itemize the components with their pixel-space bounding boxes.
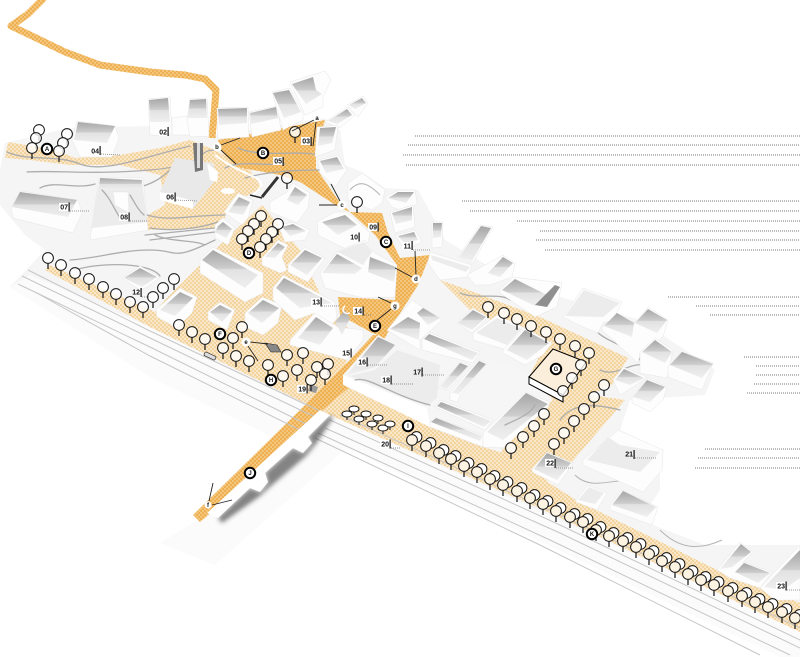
marker I bbox=[403, 421, 413, 431]
viewpoint d: d bbox=[414, 277, 418, 283]
viewpoint a: a bbox=[315, 116, 319, 122]
dotted legend lines: group 4 bbox=[744, 357, 800, 393]
label 22: 22 bbox=[546, 460, 554, 468]
label 10: 10 bbox=[350, 234, 358, 242]
trees: quarter F and H bbox=[174, 320, 333, 391]
label 21 bbox=[625, 450, 657, 459]
orange public space network bbox=[5, 120, 800, 632]
viewpoint a bbox=[292, 114, 320, 146]
buildings: north-east cluster bbox=[348, 173, 713, 412]
viewpoint g: g bbox=[393, 304, 397, 310]
marker J: J bbox=[248, 471, 252, 477]
trees: plaza singles bbox=[282, 127, 362, 213]
label 16 bbox=[357, 358, 388, 366]
viewpoint e bbox=[242, 338, 268, 361]
viewpoint f: f bbox=[207, 503, 210, 509]
trees: coastal double row bbox=[407, 432, 800, 629]
buildings: west terrace bbox=[11, 121, 160, 290]
label 17: 17 bbox=[413, 370, 421, 376]
label 19 bbox=[297, 384, 308, 394]
label 18 bbox=[381, 376, 413, 384]
viewpoint c bbox=[319, 184, 346, 210]
eastern lane and square G bbox=[440, 280, 628, 505]
dotted legend lines: group 1 bbox=[403, 136, 800, 165]
dotted legend lines: group 5 bbox=[695, 449, 800, 468]
label 06 bbox=[165, 192, 197, 202]
light plaza: D, F and H quarter bbox=[45, 205, 350, 408]
marker C bbox=[381, 237, 391, 247]
marker K bbox=[587, 529, 597, 539]
viewpoint g bbox=[376, 297, 400, 321]
marker F bbox=[215, 329, 225, 339]
marker I: I bbox=[407, 424, 409, 430]
label 04 bbox=[90, 146, 120, 156]
contour lines bbox=[7, 146, 722, 547]
buildings: south-east and far-east bbox=[532, 430, 800, 600]
buildings: central quarter bbox=[156, 183, 397, 360]
marker D: D bbox=[247, 251, 252, 257]
label 15: 15 bbox=[342, 350, 350, 358]
coastal promenade bbox=[307, 383, 800, 632]
viewpoint b: b bbox=[215, 145, 219, 151]
church bbox=[160, 143, 235, 209]
marker A: A bbox=[45, 147, 50, 153]
marker E bbox=[370, 321, 380, 331]
pavilion G bbox=[529, 349, 586, 402]
label 12 bbox=[132, 288, 150, 297]
marker B: B bbox=[261, 151, 266, 157]
trees: east lane around G bbox=[483, 302, 609, 459]
label 08: 08 bbox=[120, 214, 128, 222]
label 14: 14 bbox=[354, 308, 362, 316]
label 19: 19 bbox=[298, 386, 306, 394]
label 02 bbox=[159, 127, 169, 136]
trees: low canopy group at I bbox=[342, 406, 395, 434]
black stair and path details bbox=[204, 155, 350, 393]
dense route C and square E bbox=[338, 212, 430, 337]
marker D bbox=[244, 248, 254, 258]
viewpoint c: c bbox=[340, 203, 344, 209]
marker H bbox=[266, 375, 276, 385]
marker H: H bbox=[269, 378, 273, 384]
label 14 bbox=[353, 306, 372, 316]
label 21: 21 bbox=[625, 452, 633, 458]
label 13: 13 bbox=[312, 300, 320, 306]
viewpoint f bbox=[204, 483, 232, 509]
label 05 bbox=[273, 157, 284, 166]
light plaza: A and church terrace bbox=[5, 140, 262, 230]
label 07 bbox=[59, 202, 90, 212]
dense plaza B bbox=[218, 120, 350, 212]
label 06: 06 bbox=[166, 194, 174, 202]
marker F: F bbox=[218, 332, 222, 338]
label 20 bbox=[380, 440, 400, 448]
label 11: 11 bbox=[404, 244, 411, 250]
label 03: 03 bbox=[302, 138, 310, 146]
label 03 bbox=[301, 137, 312, 146]
label 12: 12 bbox=[132, 290, 140, 296]
pier shadow bbox=[218, 415, 333, 523]
label 13 bbox=[311, 298, 340, 306]
viewpoint markers bbox=[204, 114, 420, 509]
trees: cluster A bbox=[27, 125, 72, 162]
marker C: C bbox=[384, 240, 389, 246]
pier bbox=[207, 410, 330, 518]
label 11 bbox=[402, 241, 430, 250]
label 23: 23 bbox=[777, 584, 785, 590]
buildings: middle block around courtyard bbox=[343, 300, 553, 448]
label 05: 05 bbox=[274, 158, 282, 166]
pier walkway J bbox=[193, 335, 387, 522]
label 20: 20 bbox=[381, 442, 389, 448]
label 10 bbox=[349, 232, 360, 242]
lettered zone markers bbox=[42, 144, 597, 539]
buildings: north row bbox=[148, 71, 368, 187]
viewpoint b bbox=[212, 138, 240, 164]
label 22 bbox=[545, 459, 573, 468]
label 08 bbox=[119, 212, 148, 222]
label 07: 07 bbox=[60, 204, 68, 212]
trees: west row bbox=[43, 253, 179, 318]
dotted legend lines: group 3 bbox=[668, 297, 800, 315]
marker J bbox=[245, 468, 255, 478]
label 04: 04 bbox=[91, 148, 99, 156]
label 09: 09 bbox=[369, 224, 377, 232]
numbered building labels bbox=[59, 127, 800, 590]
marker G: G bbox=[554, 367, 559, 373]
label 18: 18 bbox=[382, 378, 390, 384]
label 17 bbox=[413, 368, 445, 376]
trail: orange hiking path bbox=[11, 0, 216, 138]
seawall stepped contours bbox=[18, 270, 800, 655]
marker E: E bbox=[373, 324, 377, 330]
label 16: 16 bbox=[358, 360, 366, 366]
label 23 bbox=[776, 582, 800, 590]
marker G bbox=[551, 364, 561, 374]
trees: grove D bbox=[237, 211, 283, 258]
label 02: 02 bbox=[159, 130, 167, 136]
marker B bbox=[258, 148, 268, 158]
label 15 bbox=[341, 348, 352, 358]
marker A bbox=[42, 144, 52, 154]
marker K: K bbox=[590, 532, 595, 538]
dotted legend lines: group 2 bbox=[462, 201, 800, 250]
label 09 bbox=[368, 222, 379, 232]
viewpoint d bbox=[395, 251, 420, 284]
viewpoint e: e bbox=[244, 340, 248, 346]
